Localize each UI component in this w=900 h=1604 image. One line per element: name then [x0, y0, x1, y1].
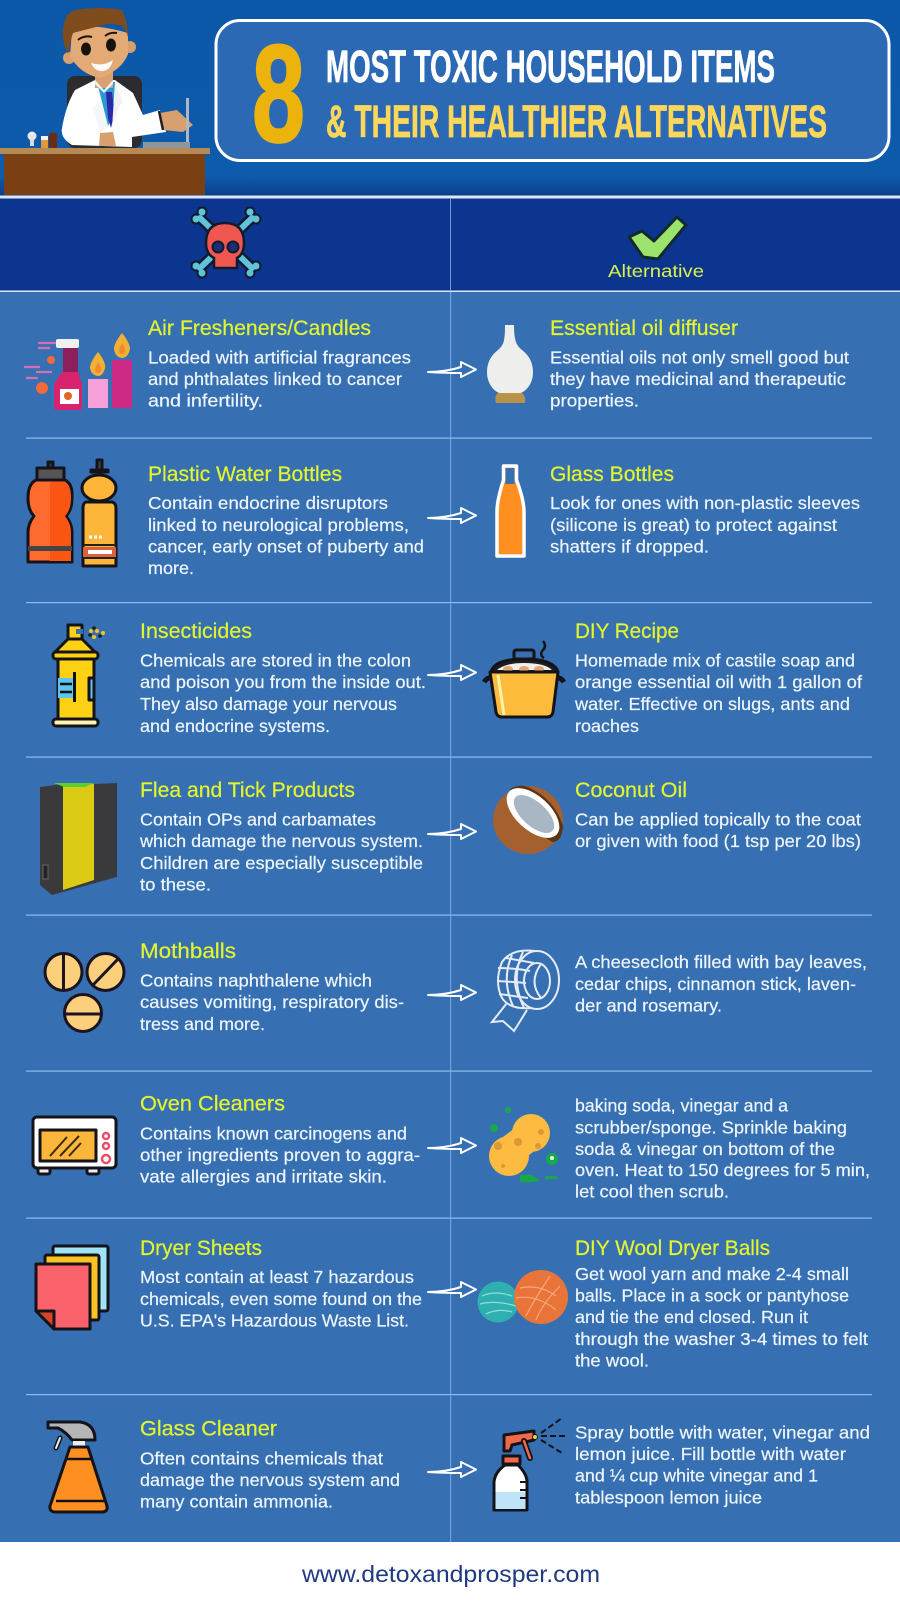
description: balls. Place in a sock or pantyhose [575, 1286, 849, 1306]
icon: spray can [53, 625, 105, 726]
description [575, 1264, 868, 1371]
row 3 alternative: DIY recipe [484, 620, 862, 736]
description [140, 651, 426, 736]
description: and tie the end closed. Run it [575, 1307, 808, 1327]
description: and phthalates linked to cancer [148, 369, 402, 389]
description [148, 493, 424, 578]
description: cancer, early onset of puberty and [148, 537, 424, 557]
description: through the washer 3-4 times to felt [575, 1329, 868, 1349]
description: Contain endocrine disruptors [148, 493, 388, 513]
label: Alternative: Alternative [608, 261, 704, 281]
description: or given with food (1 tsp per 20 lbs) [575, 831, 861, 851]
description: orange essential oil with 1 gallon of [575, 672, 862, 692]
description: Contains known carcinogens and [140, 1123, 407, 1143]
description: scrubber/sponge. Sprinkle baking [575, 1117, 847, 1137]
description: damage the nervous system and [140, 1470, 400, 1490]
heading: Essential oil diffuser [550, 317, 738, 340]
description: properties. [550, 391, 639, 411]
description: soda & vinegar on bottom of the [575, 1139, 835, 1159]
row 8 toxic: glass cleaner [48, 1418, 400, 1512]
heading: Plastic Water Bottles [148, 463, 342, 486]
row 6 alternative: sponge [489, 1096, 870, 1202]
description: tress and more. [140, 1014, 265, 1034]
illustration: doctor at desk [0, 8, 210, 195]
description [575, 1096, 870, 1202]
column header band [0, 198, 900, 292]
description: oven. Heat to 150 degrees for 5 min, [575, 1160, 870, 1180]
heading: Glass Bottles [550, 463, 674, 486]
description [140, 1123, 420, 1187]
icon: air freshener and candles [24, 333, 132, 410]
description [575, 1422, 870, 1507]
description: causes vomiting, respiratory dis- [140, 992, 404, 1012]
big number 8: 8 [252, 16, 305, 172]
row 5 toxic: mothballs [45, 940, 404, 1034]
description [140, 971, 404, 1034]
description: Often contains chemicals that [140, 1448, 383, 1468]
description: lemon juice. Fill bottle with water [575, 1444, 846, 1464]
description: Most contain at least 7 hazardous [140, 1267, 414, 1287]
description [575, 810, 861, 851]
icon: diffuser [487, 325, 533, 403]
icon: toaster oven [33, 1117, 116, 1174]
description [550, 493, 860, 557]
description [140, 1267, 422, 1331]
description: Contain OPs and carbamates [140, 810, 376, 830]
icon: skull and crossbones [190, 206, 262, 278]
description: They also damage your nervous [140, 694, 397, 714]
description: Homemade mix of castile soap and [575, 651, 855, 671]
description: to these. [140, 875, 211, 895]
row 7 toxic: dryer sheets [36, 1237, 422, 1331]
row 8 alternative: spray bottle [494, 1418, 870, 1510]
description [139, 810, 423, 895]
heading: Flea and Tick Products [140, 779, 355, 802]
arrow 1 [428, 362, 476, 377]
main content panel background [0, 292, 900, 1542]
icon: orange spray bottle [48, 1422, 107, 1512]
heading: Mothballs [140, 940, 236, 963]
description: and endocrine systems. [140, 716, 330, 736]
row 1 toxic: air fresheners [24, 317, 411, 411]
description: the wool. [575, 1351, 649, 1371]
row 1 alternative: essential oil diffuser [487, 317, 849, 411]
heading: DIY Wool Dryer Balls [575, 1237, 770, 1260]
icon: glass bottle [497, 466, 524, 556]
row 4 toxic: flea and tick products [40, 779, 423, 895]
description: Contains naphthalene which [140, 971, 372, 991]
icon: product box [40, 783, 117, 895]
heading: Air Fresheners/Candles [148, 317, 371, 340]
description: baking soda, vinegar and a [575, 1096, 788, 1116]
description: Get wool yarn and make 2-4 small [575, 1264, 849, 1284]
arrow 8 [428, 1462, 476, 1477]
icon: two sports bottles [28, 460, 116, 566]
description: der and rosemary. [575, 996, 722, 1016]
row 7 alternative: wool dryer balls [478, 1237, 868, 1371]
row 2 toxic: plastic water bottles [28, 460, 424, 578]
description [140, 1448, 400, 1512]
arrow 6 [428, 1138, 476, 1153]
arrow 4 [428, 824, 476, 839]
heading: DIY Recipe [575, 620, 679, 643]
row 2 alternative: glass bottles [497, 463, 860, 557]
description: Look for ones with non-plastic sleeves [550, 493, 860, 513]
header band [0, 0, 900, 198]
row 5 alternative: cheesecloth [492, 950, 867, 1031]
footer website: www.detoxandprosper.com [301, 1561, 600, 1587]
description: water. Effective on slugs, ants and [574, 694, 850, 714]
description: vate allergies and irritate skin. [140, 1167, 387, 1187]
icon: spray bottle with water [494, 1418, 565, 1510]
description: which damage the nervous system. [139, 831, 423, 851]
description: Children are especially susceptible [140, 853, 423, 873]
heading: Glass Cleaner [140, 1418, 277, 1441]
icon: sponge with green drops [489, 1107, 558, 1182]
arrow 3 [428, 665, 476, 680]
description [575, 952, 867, 1016]
description: A cheesecloth filled with bay leaves, [575, 952, 867, 972]
description: roaches [575, 716, 639, 736]
description: chemicals, even some found on the [140, 1289, 422, 1309]
icon: cooking pot [484, 641, 564, 717]
description [550, 347, 849, 411]
row 6 toxic: oven cleaners [33, 1093, 420, 1187]
description: other ingredients proven to aggra- [140, 1145, 420, 1165]
description: and ¼ cup white vinegar and 1 [575, 1466, 818, 1486]
description: U.S. EPA's Hazardous Waste List. [140, 1311, 409, 1331]
description [574, 651, 862, 736]
icon: green check mark [629, 217, 686, 259]
heading: Insecticides [140, 620, 252, 643]
description: cedar chips, cinnamon stick, laven- [575, 974, 856, 994]
heading: Dryer Sheets [140, 1237, 262, 1260]
description: shatters if dropped. [550, 537, 709, 557]
description [148, 347, 411, 411]
icon: stacked dryer sheets [36, 1246, 108, 1329]
row 3 toxic: insecticides [53, 620, 426, 736]
arrow 7 [428, 1282, 476, 1297]
description: linked to neurological problems, [148, 515, 409, 535]
description: (silicone is great) to protect against [550, 515, 837, 535]
title panel [216, 16, 889, 172]
description: and infertility. [148, 391, 263, 411]
description: Essential oils not only smell good but [550, 347, 849, 367]
description: they have medicinal and therapeutic [550, 369, 846, 389]
description: and poison you from the inside out. [140, 672, 426, 692]
description: tablespoon lemon juice [575, 1487, 762, 1507]
arrow 2 [428, 508, 476, 523]
description: let cool then scrub. [575, 1182, 729, 1202]
description: many contain ammonia. [140, 1492, 333, 1512]
heading: Oven Cleaners [140, 1093, 285, 1116]
description: more. [148, 558, 194, 578]
icon: cheesecloth roll [492, 950, 559, 1031]
description: Loaded with artificial fragrances [148, 347, 411, 367]
description: Spray bottle with water, vinegar and [575, 1422, 870, 1442]
description: Can be applied topically to the coat [575, 810, 861, 830]
icon: yarn balls [478, 1270, 568, 1324]
arrow 5 [428, 985, 476, 1000]
heading: Coconut Oil [575, 779, 687, 802]
description: Chemicals are stored in the colon [140, 651, 411, 671]
icon: coconut [493, 779, 568, 854]
icon: three pills [45, 954, 124, 1032]
row 4 alternative: coconut oil [493, 779, 861, 854]
